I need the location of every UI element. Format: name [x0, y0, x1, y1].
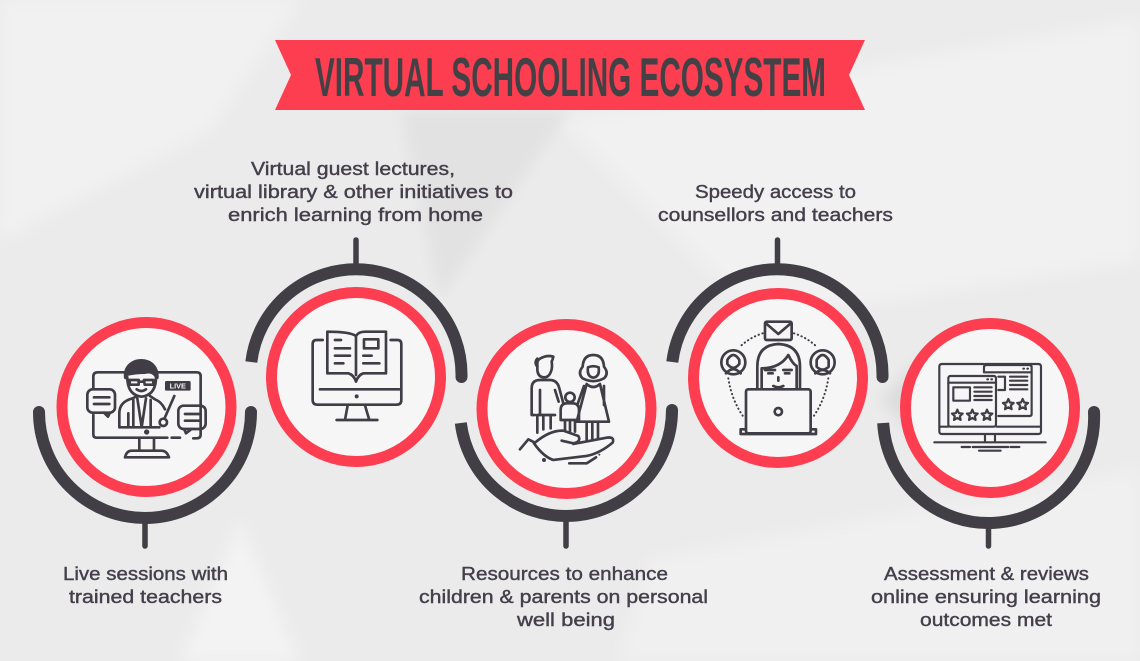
ring 4: [694, 294, 862, 462]
ring 1: [62, 322, 231, 492]
step 3 caption: Resources to enhance: [461, 563, 668, 584]
step 3 caption: [419, 563, 708, 630]
step 5 caption: Assessment & reviews: [884, 563, 1089, 584]
arc frame 2: [251, 240, 468, 383]
icon: book on monitor: [313, 332, 401, 420]
step 2: guest lectures and library: [251, 240, 468, 462]
ring 5: [906, 324, 1074, 492]
step 4 caption: [658, 181, 893, 225]
step 2 caption: Virtual guest lectures,: [251, 158, 455, 179]
step 5 caption: online ensuring learning: [871, 586, 1101, 607]
step 1 caption: [63, 563, 228, 607]
icon: rated web pages on monitor: [934, 364, 1046, 451]
step 4 caption: counsellors and teachers: [658, 204, 893, 225]
step 3: family resources: [461, 324, 678, 546]
step 5: assessment and reviews: [883, 324, 1100, 546]
arc frame 3: [461, 404, 678, 546]
arc frame 5: [883, 406, 1100, 546]
step 3 caption: well being: [516, 609, 615, 630]
step 5 caption: outcomes met: [920, 609, 1052, 630]
step 1 caption: trained teachers: [69, 586, 222, 607]
step 2 caption: virtual library & other initiatives to: [194, 181, 513, 202]
step 2 caption: [194, 158, 513, 225]
live label: LIVE: [170, 382, 186, 391]
ring 3: [482, 324, 651, 494]
step 4 caption: Speedy access to: [695, 181, 856, 202]
step 1 caption: Live sessions with: [63, 563, 228, 584]
title banner: [275, 40, 865, 110]
arc frame 4: [672, 240, 888, 383]
step 5 caption: [871, 563, 1101, 630]
ring 2: [272, 292, 440, 462]
step 4: counsellor access: [672, 240, 888, 462]
step 3 caption: children & parents on personal: [419, 586, 708, 607]
arc frame 1: [39, 412, 251, 546]
step 1: live sessions: [39, 322, 251, 546]
icon: teacher on screen: [87, 359, 206, 457]
icon: counsellor with laptop: [721, 322, 835, 434]
icon: family on a hand: [520, 355, 613, 463]
step 2 caption: enrich learning from home: [228, 204, 483, 225]
